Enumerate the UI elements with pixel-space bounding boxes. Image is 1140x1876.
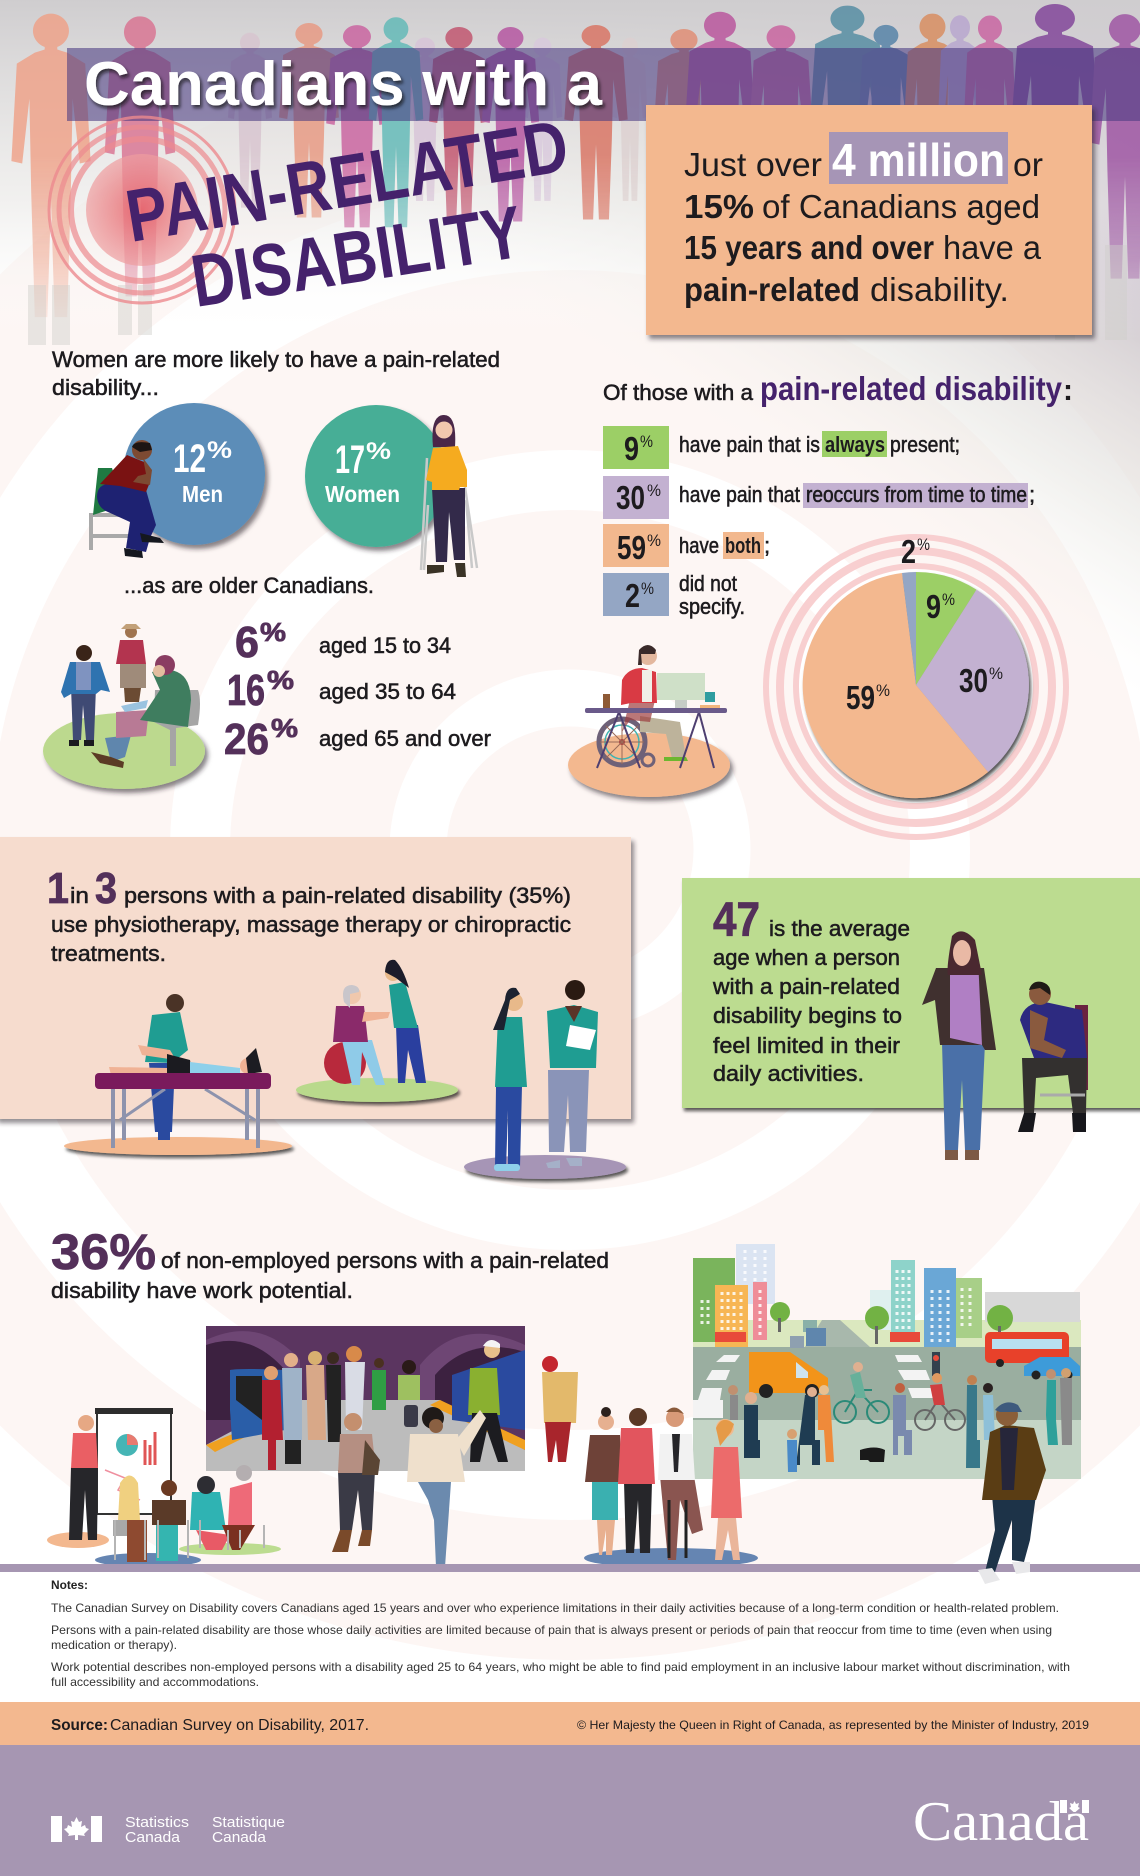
callout: 4 million: disability.: [870, 271, 1009, 308]
stat: age groups: %: [267, 665, 294, 695]
text: 47 average age: feel limited in their: [713, 1033, 900, 1058]
text: 1 in 3: 3: [95, 864, 117, 913]
legend: pain types: present;: [890, 432, 960, 457]
text: 1 in 3: [47, 864, 571, 966]
faint reflections of people: [28, 245, 1127, 345]
footer: [0, 1745, 1140, 1876]
text: 47 average age: 47: [713, 894, 760, 947]
circle: men 12%: %: [207, 437, 232, 464]
source band: Source:: [51, 1717, 108, 1734]
text: 36% work potential: disability have work potential.: [51, 1278, 353, 1303]
legend: pain types: 2: [625, 577, 640, 614]
stat: age groups: 6: [235, 618, 259, 667]
pie chart with rings: 30: [959, 662, 988, 699]
text: 47 average age: age when a person: [713, 945, 900, 970]
logo: Statistics Canada: [51, 1814, 285, 1846]
callout: 4 million: of Canadians aged: [762, 188, 1040, 225]
text: 1 in 3: treatments.: [51, 941, 166, 966]
text: 36% work potential: [51, 1224, 609, 1303]
text: 47 average age: [712, 894, 910, 1086]
legend: pain types: %: [641, 579, 654, 598]
legend: pain types: 9: [624, 430, 639, 467]
heading: of those with a pain-related disability: :: [1063, 374, 1073, 407]
title: Canadians with a: Canadians with a: [84, 50, 603, 119]
pie chart with rings: 59: [846, 679, 875, 716]
stat: age groups: 26: [224, 715, 269, 764]
title band: [67, 48, 1140, 121]
divider bar: [0, 1564, 1140, 1572]
callout: 4 million: pain-related: [684, 271, 860, 308]
illustration: man sitting with hand on face: [1018, 982, 1088, 1132]
text: 1 in 3: persons with a pain-related disability (35%): [124, 883, 571, 908]
text: 47 average age: daily activities.: [713, 1061, 864, 1086]
heading: of those with a pain-related disability: pain-related disability: [760, 370, 1063, 407]
illustration: therapist with patient on exercise ball: [296, 960, 458, 1102]
panel: average age 47: [682, 878, 1140, 1108]
text: 1 in 3: 1: [47, 864, 69, 913]
source band: Canadian Survey on Disability, 2017.: [110, 1717, 369, 1734]
title: PAIN-RELATED DISABILITY: DISABILITY: [186, 190, 528, 323]
legend: pain types: %: [647, 531, 661, 550]
panel: therapies: [0, 837, 631, 1119]
text: 47 average age: with a pain-related: [712, 974, 900, 999]
text: as are older Canadians: ...as are older Canadians.: [124, 573, 374, 598]
red target rings: [49, 117, 235, 303]
circle: men 12%: Men: [182, 481, 223, 507]
icon: man sitting on chair: [91, 440, 164, 558]
illustration: woman with scarf: [922, 931, 996, 1160]
stat: age groups: %: [271, 713, 298, 743]
legend: pain types: both: [725, 533, 761, 558]
text: 47 average age: disability begins to: [713, 1003, 902, 1028]
notes: full accessibility and accommodations.: [51, 1675, 259, 1689]
callout: 4 million: Just over: [684, 146, 822, 183]
logo: Canada wordmark: Canada: [913, 1791, 1089, 1853]
stat: age groups: [224, 617, 491, 764]
pie chart with rings: 9: [926, 588, 941, 625]
stat: age groups: %: [260, 617, 286, 647]
notes: Work potential describes non-employed persons with a disability aged 25 to 64 years, who might be able to find paid employment in an inclusive labour market without discrimination, with: [51, 1660, 1070, 1674]
callout: 4 million: 15%: [684, 188, 754, 225]
pie chart with rings: %: [876, 681, 890, 700]
stat: age groups: aged 15 to 34: [319, 633, 451, 658]
source band: [0, 1702, 1140, 1745]
logo: Statistics Canada: Statistics: [125, 1814, 189, 1831]
stat: age groups: 16: [227, 666, 265, 715]
illustration: person in wheelchair at desk: [568, 645, 730, 797]
logo: Statistics Canada: Canada: [125, 1829, 181, 1846]
source band: © Her Majesty the Queen in Right of Canada, as represented by the Minister of Industry, 2019: [577, 1718, 1089, 1732]
illustration: man in red cap: [542, 1356, 578, 1462]
heading: women more likely: Women are more likely to have a pain-related: [52, 347, 500, 372]
notes: [51, 1578, 1070, 1689]
circle: women 17%: %: [366, 438, 391, 465]
notes: Persons with a pain-related disability are those whose daily activities are limited because of pain that is always present or periods of pain that reoccur from time to time (even when using: [51, 1623, 1052, 1637]
illustration: subway platform: [206, 1326, 525, 1471]
pie chart with rings: %: [917, 535, 930, 554]
legend: pain types: %: [640, 432, 653, 451]
stat: age groups: aged 65 and over: [319, 726, 491, 751]
legend: pain types: [603, 426, 1035, 619]
icon: woman with crutches: [421, 415, 477, 577]
legend: pain types: have: [679, 533, 719, 558]
logo: Statistics Canada: Canada: [212, 1829, 267, 1846]
legend: pain types: ;: [764, 533, 770, 558]
logo: Statistics Canada: Statistique: [212, 1814, 285, 1831]
title: PAIN-RELATED DISABILITY: [120, 104, 574, 323]
silhouettes of people: [11, 4, 1140, 317]
illustration: two nurses: [464, 980, 626, 1179]
callout: 4 million: 15 years and over: [684, 229, 934, 266]
illustration: presenter and audience: [47, 1408, 281, 1567]
text: 36% work potential: 36%: [51, 1224, 156, 1280]
illustration: city street: [693, 1244, 1081, 1479]
notes: The Canadian Survey on Disability covers Canadians aged 15 years and over who experience limitations in their daily activities because of a long-term condition or health-related problem.: [51, 1601, 1059, 1615]
legend: pain types: always: [825, 432, 885, 457]
notes: Notes:: [51, 1578, 88, 1592]
text: 1 in 3: in: [70, 883, 89, 908]
illustration: man in brown coat walking: [978, 1402, 1046, 1584]
legend: pain types: %: [647, 481, 661, 500]
legend: pain types: have pain that is: [679, 432, 820, 457]
circle: women 17%: 17: [335, 438, 365, 482]
circle: men 12%: [123, 403, 265, 545]
pie chart with rings: 2: [901, 533, 916, 570]
pie chart with rings: %: [942, 590, 955, 609]
stat: age groups: aged 35 to 64: [319, 679, 456, 704]
legend: pain types: ;: [1029, 482, 1035, 507]
legend: pain types: have pain that: [679, 482, 800, 507]
text: 1 in 3: use physiotherapy, massage therapy or chiropractic: [51, 912, 571, 937]
circle: women 17%: [305, 405, 447, 547]
pie chart with rings: %: [989, 664, 1003, 683]
text: 47 average age: is the average: [769, 916, 910, 941]
heading: of those with a pain-related disability: Of those with a: [603, 380, 754, 405]
illustration: business group: [584, 1407, 758, 1568]
heading: of those with a pain-related disability: [603, 370, 1073, 407]
title: PAIN-RELATED DISABILITY: PAIN-RELATED: [120, 104, 574, 258]
notes: medication or therapy).: [51, 1638, 177, 1652]
circle: men 12%: 12: [173, 437, 206, 481]
callout: 4 million: [646, 105, 1092, 335]
illustration: older people in park: [43, 624, 205, 789]
heading: women more likely: disability...: [52, 375, 159, 400]
callout: 4 million: 4 million: [832, 134, 1005, 186]
legend: pain types: specify.: [679, 594, 745, 619]
pie chart with rings: [766, 533, 1066, 837]
legend: pain types: 59: [617, 529, 646, 566]
illustration: walking woman: [332, 1413, 380, 1552]
callout: 4 million: or: [1013, 146, 1043, 183]
illustration: woman raising arm: [407, 1407, 486, 1567]
heading: women more likely: [52, 347, 500, 400]
illustration: massage table: [64, 994, 292, 1155]
text: 36% work potential: of non-employed persons with a pain-related: [161, 1248, 609, 1273]
legend: pain types: did not: [679, 571, 737, 596]
legend: pain types: reoccurs from time to time: [806, 482, 1027, 507]
callout: 4 million: have a: [943, 229, 1042, 266]
legend: pain types: 30: [616, 479, 645, 516]
circle: women 17%: Women: [325, 481, 400, 507]
